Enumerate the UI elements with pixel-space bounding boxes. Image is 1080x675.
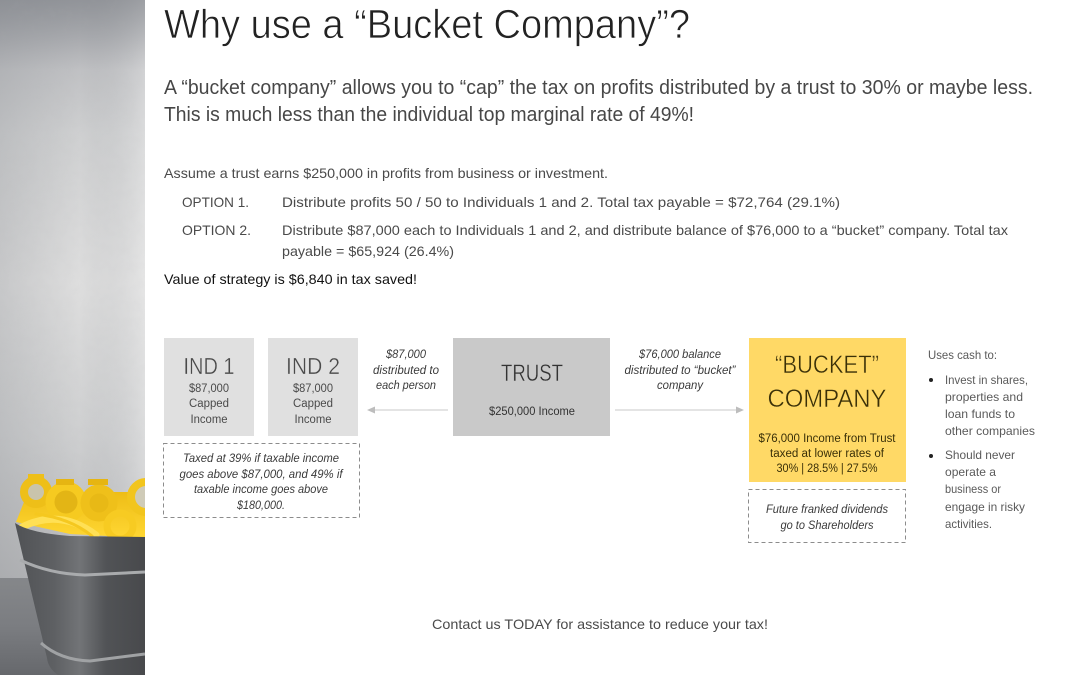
list: uses of cash: other companies	[945, 424, 1035, 438]
intro text: This is much less than the individual top marginal rate of 49%!	[164, 104, 694, 126]
callout: individual tax rates: $180,000.	[236, 500, 285, 512]
label: distribution to individuals	[373, 349, 440, 392]
list: uses of cash: activities.	[945, 517, 992, 531]
box: individual 2: Capped	[293, 398, 333, 410]
scenario and options text: Distribute $87,000 each to Individuals 1 and 2, and distribute balance of $76,000 to a “bucket” company. Total tax	[282, 222, 1008, 238]
callout: franked dividends: Future franked dividends	[766, 504, 888, 516]
title: Why use a “Bucket Company”?	[164, 1, 690, 47]
scenario and options text: payable = $65,924 (26.4%)	[282, 243, 454, 259]
list: uses of cash	[928, 348, 1035, 531]
callout: franked dividends: go to Shareholders	[780, 520, 874, 532]
list: uses of cash: loan funds to	[945, 407, 1015, 421]
intro text	[164, 77, 1033, 126]
box: individual 1: Income	[190, 414, 228, 426]
box: individual 1	[164, 338, 254, 436]
list: uses of cash: operate a	[945, 465, 996, 479]
icon: gold dollar coins	[16, 474, 145, 537]
intro text: A “bucket company” allows you to “cap” the tax on profits distributed by a trust to 30% or maybe less.	[164, 77, 1033, 99]
box: bucket company: “BUCKET”	[775, 351, 879, 379]
scenario and options text: OPTION 2.	[182, 222, 251, 238]
box: trust	[453, 338, 610, 436]
callout: franked dividends	[748, 490, 906, 542]
box: individual 1: IND 1	[184, 353, 234, 379]
callout: individual tax rates: Taxed at 39% if taxable income	[183, 453, 339, 465]
label: distribution to individuals: distributed to	[373, 365, 440, 377]
list: uses of cash: engage in risky	[945, 500, 1025, 514]
box: individual 2: IND 2	[286, 353, 340, 379]
box: bucket company	[749, 338, 906, 482]
box: individual 1: Capped	[189, 398, 229, 410]
label: distribution to individuals: $87,000	[385, 349, 427, 361]
list: uses of cash: properties and	[945, 390, 1023, 404]
panel: concrete wall photo with bucket of coins	[0, 0, 161, 675]
list: uses of cash: Invest in shares,	[945, 373, 1028, 387]
box: individual 2: $87,000	[293, 383, 333, 395]
call to action: Contact us TODAY for assistance to reduce your tax!	[432, 616, 768, 632]
arrow: trust to bucket company	[615, 406, 744, 414]
label: distribution to individuals: each person	[376, 380, 436, 392]
box: bucket company: $76,000 Income from Trust	[758, 433, 896, 445]
scenario and options text: Assume a trust earns $250,000 in profits from business or investment.	[164, 165, 608, 181]
box: bucket company: taxed at lower rates of	[770, 448, 885, 460]
scenario and options text: Distribute profits 50 / 50 to Individuals 1 and 2. Total tax payable = $72,764 (29.1%)	[282, 194, 840, 210]
callout: individual tax rates: taxable income goes above	[194, 484, 328, 496]
box: trust: $250,000 Income	[489, 404, 575, 418]
list: uses of cash: Should never	[945, 448, 1015, 462]
icon: metal bucket	[15, 523, 145, 675]
box: trust: TRUST	[501, 360, 563, 387]
arrow: trust to individuals	[367, 406, 448, 414]
label: distribution to bucket company: company	[657, 380, 704, 392]
callout: individual tax rates: goes above $87,000, and 49% if	[180, 469, 344, 481]
label: distribution to bucket company: $76,000 balance	[638, 349, 721, 361]
list: uses of cash: business or	[945, 482, 1001, 496]
list: uses of cash: Uses cash to:	[928, 348, 997, 362]
label: distribution to bucket company	[624, 349, 737, 392]
value of strategy statement: Value of strategy is $6,840 in tax saved!	[164, 271, 417, 287]
box: individual 2: Income	[294, 414, 332, 426]
callout: individual tax rates	[164, 444, 360, 518]
box: individual 2	[268, 338, 358, 436]
box: bucket company: 30% | 28.5% | 27.5%	[776, 463, 878, 475]
scenario and options text: OPTION 1.	[182, 194, 249, 210]
scenario and options text	[164, 165, 1008, 259]
label: distribution to bucket company: distributed to “bucket”	[624, 365, 737, 377]
box: bucket company: COMPANY	[768, 385, 887, 413]
box: individual 1: $87,000	[189, 383, 229, 395]
